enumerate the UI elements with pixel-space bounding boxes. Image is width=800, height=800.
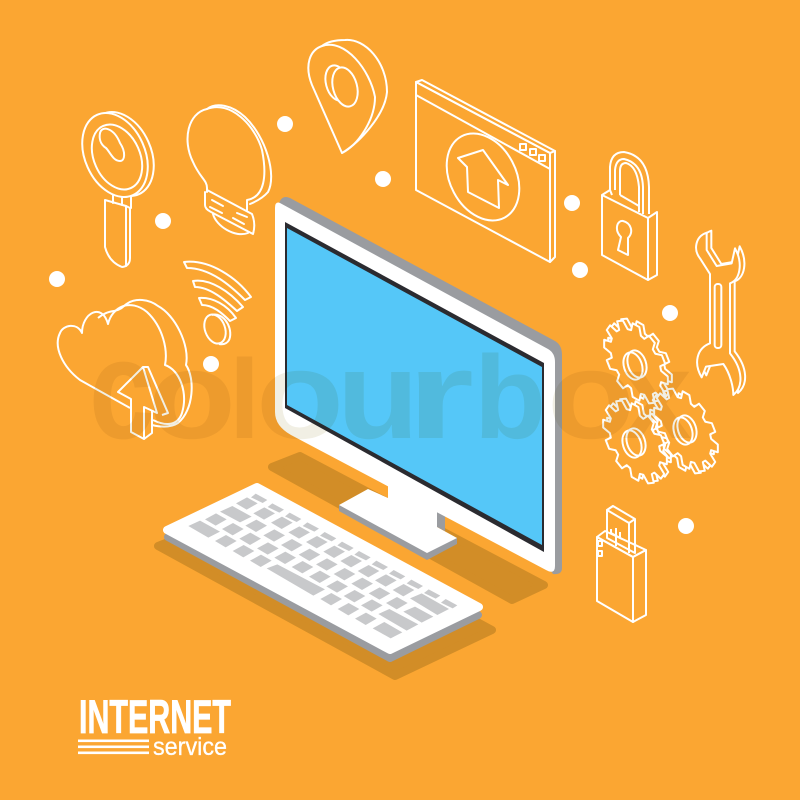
watermark: colourbox: o [547, 326, 635, 465]
watermark: colourbox: r [407, 326, 474, 465]
gear bottom left [603, 385, 671, 497]
watermark: colourbox: c [89, 310, 155, 469]
icon: location pin [308, 40, 387, 153]
title: internet service [78, 690, 231, 761]
keyboard keys [188, 494, 457, 638]
decorative dots [49, 116, 694, 534]
watermark: colourbox: o [148, 326, 236, 465]
monitor stand [339, 470, 457, 560]
monitor [275, 197, 562, 574]
icon: wrench [696, 231, 745, 395]
title: internet service: INTERNET [79, 690, 231, 743]
icon: light bulb [188, 105, 271, 234]
keyboard [167, 487, 479, 658]
gear bottom right [650, 375, 718, 487]
watermark: colourbox: u [337, 326, 419, 465]
icon: upload cloud [58, 300, 192, 439]
icon: gears [603, 305, 718, 497]
icon: usb drive [597, 506, 646, 622]
icon: browser window with upload arrow [416, 80, 555, 262]
gear top [604, 305, 672, 417]
icon: wifi [184, 262, 251, 347]
icon: magnifying glass [70, 102, 166, 267]
keyboard shadow [158, 510, 492, 676]
icon: padlock [602, 152, 657, 280]
watermark: colourbox: o [256, 326, 344, 465]
screen [285, 222, 544, 552]
title: internet service: service [153, 733, 227, 761]
monitor shadow [272, 456, 544, 600]
watermark: colourbox: x [622, 326, 692, 465]
watermark: colourbox: b [474, 332, 546, 464]
watermark: colourbox: l [229, 337, 260, 462]
